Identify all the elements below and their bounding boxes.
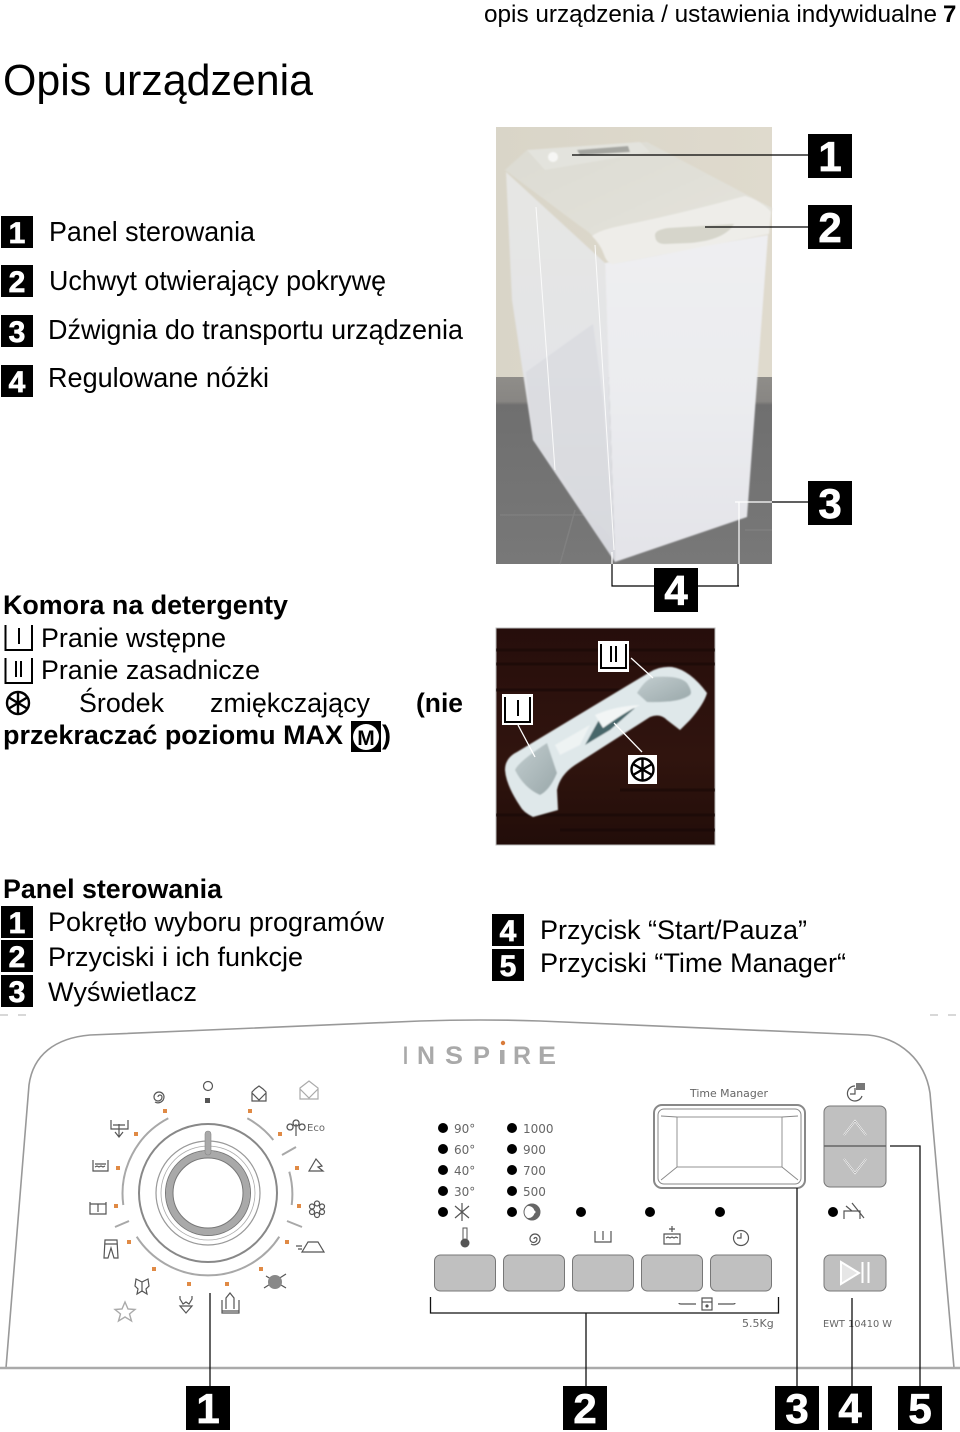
- text block: detergent compartment: ): [382, 720, 391, 750]
- model labels: [689, 1087, 892, 1330]
- panel badge 1: 1: [196, 1385, 220, 1432]
- label: prewash compartment: [502, 694, 533, 725]
- panel badge 3: [775, 1385, 819, 1432]
- text block: detergent compartment: [3, 590, 463, 752]
- panel badge 3: 3: [785, 1385, 809, 1432]
- control legend item 3: 3: [9, 976, 25, 1009]
- function buttons: [434, 1255, 772, 1291]
- title: Opis urządzenia: [3, 56, 314, 105]
- text block: control panel legend: Panel sterowania: [3, 874, 223, 904]
- legend item 3: 3: [9, 316, 25, 349]
- icon: MAX marker: [351, 721, 381, 752]
- legend item 1: Panel sterowania: [49, 216, 255, 247]
- badge 3: [808, 480, 852, 527]
- photo: washing machine: [496, 127, 772, 564]
- control legend item 1: Pokrętło wyboru programów: [48, 907, 384, 937]
- icon: softener: [7, 692, 29, 714]
- temperature and spin indicators: 60°: [454, 1143, 475, 1157]
- control legend item 2: Przyciski i ich funkcje: [48, 942, 303, 972]
- time manager buttons: [824, 1083, 886, 1219]
- legend item 4: 4: [9, 366, 26, 399]
- text block: detergent compartment: (nie: [416, 688, 463, 718]
- temperature and spin indicators: 500: [523, 1185, 546, 1199]
- child lock symbol: [679, 1298, 735, 1310]
- text block: control panel legend: [1, 874, 846, 1009]
- legend: parts of the appliance: [1, 216, 463, 399]
- dial orange markers: [114, 1109, 301, 1286]
- model labels: 5.5Kg: [742, 1317, 774, 1330]
- callout lines and badges under control panel: [186, 1146, 942, 1432]
- panel badge 2: 2: [573, 1385, 597, 1432]
- badge 4: 4: [664, 567, 688, 614]
- control legend item 5: Przyciski “Time Manager“: [540, 948, 846, 978]
- logo: INSPIRE: S: [445, 1042, 463, 1070]
- control legend item 2: 2: [9, 941, 25, 974]
- text block: detergent compartment: zmiękczający: [210, 688, 370, 718]
- text block: detergent compartment: przekraczać poziomu MAX: [3, 720, 343, 750]
- model labels: Time Manager: [689, 1087, 768, 1100]
- temperature and spin indicators: 90°: [454, 1122, 475, 1136]
- photo: detergent drawer: [496, 628, 715, 845]
- panel badge 4: [828, 1385, 872, 1432]
- legend item 1: 1: [9, 217, 25, 250]
- legend item 2: Uchwyt otwierający pokrywę: [49, 265, 386, 296]
- program dial: [114, 1109, 302, 1286]
- dial program icons: Eco: [307, 1123, 325, 1134]
- function button icons: [460, 1226, 748, 1248]
- label: main wash compartment: [598, 641, 629, 672]
- control panel drawing: [0, 1015, 960, 1368]
- page header: 7: [943, 1, 956, 28]
- text block: detergent compartment: Komora na detergenty: [3, 590, 288, 620]
- badge 3: 3: [818, 480, 842, 527]
- panel badge 5: [898, 1385, 942, 1432]
- callouts on washing machine photo: [572, 133, 852, 614]
- legend item 4: [1, 362, 269, 399]
- control legend item 3: [1, 975, 197, 1009]
- text block: detergent compartment: Pranie wstępne: [41, 623, 226, 653]
- badge 1: [808, 133, 852, 180]
- logo: INSPIRE: N: [417, 1042, 435, 1070]
- model labels: EWT 10410 W: [823, 1319, 892, 1330]
- panel badge 1: [186, 1385, 230, 1432]
- control legend item 5: 5: [500, 950, 516, 983]
- control legend item 3: Wyświetlacz: [48, 977, 197, 1007]
- temperature and spin indicators: 900: [523, 1143, 546, 1157]
- text block: detergent compartment: Środek: [79, 686, 164, 718]
- control legend item 4: 4: [500, 915, 517, 948]
- control legend item 1: 1: [9, 907, 25, 940]
- badge 2: 2: [818, 204, 842, 251]
- start pause button: [824, 1255, 886, 1291]
- page header: opis urządzenia / ustawienia indywidualne: [484, 1, 937, 28]
- legend item 2: 2: [9, 266, 25, 299]
- dial program icons: [90, 1081, 325, 1321]
- logo: INSPIRE: P: [473, 1042, 490, 1070]
- logo: INSPIRE: I: [403, 1042, 408, 1070]
- temperature and spin indicators: [438, 1122, 838, 1221]
- text block: detergent compartment: Pranie zasadnicze: [41, 655, 260, 685]
- badge 4: [654, 567, 698, 614]
- legend item 4: Regulowane nóżki: [48, 362, 269, 393]
- legend item 3: Dźwignia do transportu urządzenia: [48, 314, 463, 345]
- panel badge 4: 4: [838, 1385, 862, 1432]
- control legend item 4: Przycisk “Start/Pauza”: [540, 915, 807, 945]
- badge 2: [808, 204, 852, 251]
- label: softener compartment: [628, 755, 657, 784]
- panel outline: [0, 1020, 960, 1368]
- panel badge 2: [563, 1385, 607, 1432]
- logo: INSPIRE: R: [513, 1042, 531, 1070]
- icon: prewash: [6, 625, 32, 650]
- temperature and spin indicators: 700: [523, 1164, 546, 1178]
- panel badge 5: 5: [908, 1385, 932, 1432]
- temperature and spin indicators: 40°: [454, 1164, 475, 1178]
- logo: INSPIRE: E: [538, 1042, 556, 1070]
- temperature and spin indicators: 30°: [454, 1185, 475, 1199]
- badge 1: 1: [818, 133, 842, 180]
- icon: MAX marker: M: [357, 727, 375, 750]
- logo: INSPIRE: [403, 1041, 556, 1070]
- display: [654, 1105, 805, 1188]
- icon: main wash: [6, 658, 32, 683]
- temperature and spin indicators: 1000: [523, 1122, 554, 1136]
